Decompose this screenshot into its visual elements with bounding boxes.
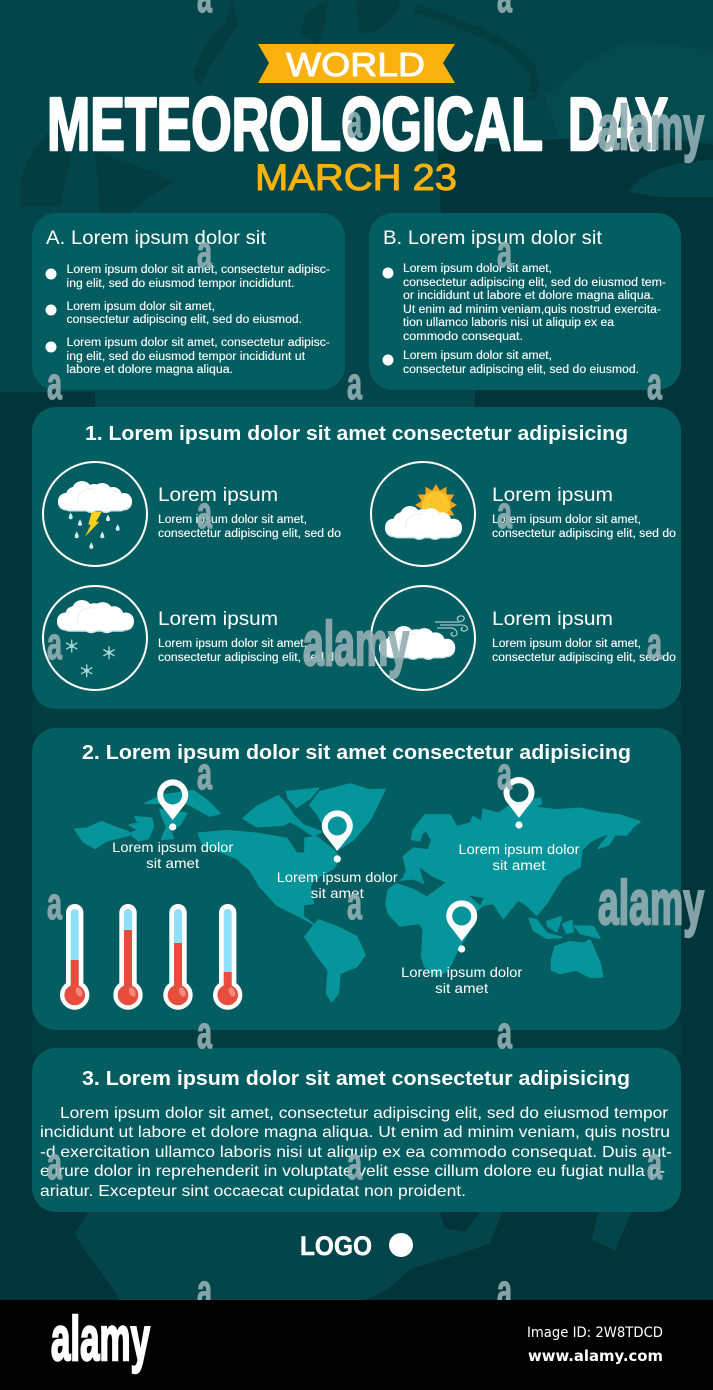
text: thunderstorm: consectetur adipiscing elit, sed do [158, 528, 341, 540]
pin 3 label: Lorem ipsum dolor [458, 841, 580, 857]
text: sunny: consectetur adipiscing elit, sed do [492, 528, 676, 540]
image id: Image ID: 2W8TDCD [527, 1325, 663, 1341]
pin 1 label: sit amet [146, 855, 199, 871]
pin 3 label: sit amet [492, 857, 546, 873]
map pin 3 [504, 777, 534, 829]
icon: snow [43, 586, 147, 690]
text: thunderstorm: Lorem ipsum dolor sit amet, [158, 514, 307, 526]
section 2 heading: 2. Lorem ipsum dolor sit amet consectetur adipisicing [82, 742, 631, 764]
bullet list B: tion ullamco laboris nisi ut aliquip ex ea [403, 317, 615, 329]
section 3 paragraph: Lorem ipsum dolor sit amet, consectetur adipiscing elit, sed do eiusmod tempor [60, 1105, 669, 1122]
bullet list B: consectetur adipiscing elit, sed do eiusmod. [403, 364, 639, 376]
thermometer 3 [163, 904, 193, 1010]
date: MARCH 23 [255, 157, 457, 198]
ribbon: world [258, 44, 455, 83]
bullet list A: ing elit, sed do eiusmod tempor incididunt ut [66, 351, 306, 363]
world map [75, 784, 640, 1002]
text: snow: Lorem ipsum [158, 609, 278, 630]
pin 2 label: Lorem ipsum dolor [277, 869, 398, 885]
header [47, 44, 668, 198]
text: wind [492, 609, 676, 664]
watermark letters: a [347, 358, 363, 409]
bullet list A: Lorem ipsum dolor sit amet, [66, 301, 215, 313]
watermark letters: a [47, 358, 63, 409]
section 3 paragraph: -d exercitation ullamco laboris nisi ut aliquip ex ea commodo consequat. Duis aut- [40, 1144, 672, 1161]
text: sunny: Lorem ipsum [492, 485, 613, 506]
heading A: A. Lorem ipsum dolor sit [46, 228, 267, 249]
watermark letters: a [647, 618, 663, 669]
footer bar [0, 1300, 713, 1390]
icon: thunderstorm [43, 462, 147, 566]
watermark letters: a [197, 487, 213, 538]
pin 1 label [112, 839, 234, 871]
bullet list A: Lorem ipsum dolor sit amet, consectetur adipisc- [66, 337, 330, 349]
watermark letters: a [197, 226, 213, 277]
bullet list B: Lorem ipsum dolor sit amet, [403, 350, 552, 362]
bullet list B [382, 263, 666, 376]
website: www.alamy.com [528, 1347, 663, 1365]
watermark letters: a [47, 618, 63, 669]
watermark letters: a [197, 1265, 213, 1316]
thermometers [60, 904, 242, 1010]
panel: section 1 weather types [32, 407, 681, 709]
section 1 heading: 1. Lorem ipsum dolor sit amet consectetur adipisicing [85, 423, 628, 445]
pin 4 label: sit amet [435, 980, 488, 996]
bullet list A: labore et dolore magna aliqua. [66, 364, 233, 376]
icon: sun behind cloud [371, 462, 475, 566]
thermometer 4 [213, 904, 242, 1010]
bullet list B: Ut enim ad minim veniam,quis nostrud exercita- [403, 304, 661, 316]
text: wind: Lorem ipsum dolor sit amet, [492, 638, 641, 650]
map pin 2 [322, 810, 353, 863]
text: wind: Lorem ipsum [492, 609, 613, 630]
bullet list A [46, 264, 330, 376]
logo: LOGO [300, 1231, 372, 1261]
bullet list A: consectetur adipiscing elit, sed do eiusmod. [66, 314, 302, 326]
bullet list B: commodo consequat. [403, 331, 523, 343]
text: snow [158, 609, 341, 664]
panel: section 3 paragraph [32, 1048, 681, 1212]
thermometer 2 [113, 904, 143, 1010]
watermark letters: a [197, 748, 213, 799]
watermark letters: alamy [303, 610, 409, 679]
watermark letters: a [647, 1138, 663, 1189]
section 3 paragraph: incididunt ut labore et dolore magna aliqua. Ut enim ad minim veniam, quis nostru [40, 1124, 670, 1141]
panel: A [32, 213, 345, 390]
text: wind: consectetur adipiscing elit, sed do [492, 652, 676, 664]
section 3 paragraph: ariatur. Excepteur sint occaecat cupidatat non proident. [40, 1183, 466, 1200]
pin 2 label: sit amet [311, 885, 364, 901]
section 3 heading: 3. Lorem ipsum dolor sit amet consectetur adipisicing [82, 1068, 630, 1090]
thermometer 1 [60, 904, 89, 1010]
watermark letters: a [197, 1007, 213, 1058]
text: sunny [492, 485, 676, 540]
watermark letters: a [347, 1138, 363, 1189]
watermark letters: a [497, 748, 513, 799]
footer brand: alamy [51, 1305, 150, 1374]
heading B: B. Lorem ipsum dolor sit [383, 228, 603, 249]
pin 1 label: Lorem ipsum dolor [112, 839, 234, 855]
text: snow: consectetur adipiscing elit, sed do [158, 652, 341, 664]
watermark letters: a [47, 878, 63, 929]
text: thunderstorm [158, 485, 341, 540]
panel: B [369, 213, 681, 390]
section 3 paragraph: e irure dolor in reprehenderit in voluptate velit esse cillum dolore eu fugiat nulla p- [40, 1163, 665, 1180]
text: sunny: Lorem ipsum dolor sit amet, [492, 514, 641, 526]
watermark letters: a [497, 226, 513, 277]
pin 4 label [401, 964, 523, 996]
watermark letters: a [497, 1007, 513, 1058]
icon: wind [371, 586, 475, 690]
watermark letters: a [47, 1138, 63, 1189]
panel: section 2 world map [32, 728, 681, 1030]
section 3 paragraph [40, 1105, 672, 1200]
ribbon label: WORLD [286, 46, 425, 83]
watermark letters: a [347, 96, 363, 147]
watermark letters: a [647, 358, 663, 409]
watermark letters: a [347, 878, 363, 929]
pin 4 label: Lorem ipsum dolor [401, 964, 523, 980]
map pin 1 [157, 779, 188, 831]
pin 2 label [277, 869, 398, 901]
watermark letters: a [497, 487, 513, 538]
bullet list A: Lorem ipsum dolor sit amet, consectetur adipisc- [66, 264, 330, 276]
bullet list B: or incididunt ut labore et dolore magna aliqua. [403, 290, 654, 302]
bullet list B: consectetur adipiscing elit, sed do eiusmod tem- [403, 277, 666, 289]
pin 3 label [458, 841, 580, 873]
bullet list A: ing elit, sed do eiusmod tempor incididunt. [66, 278, 294, 290]
map pin 4 [446, 900, 477, 953]
bullet list B: Lorem ipsum dolor sit amet, [403, 263, 552, 275]
text: thunderstorm: Lorem ipsum [158, 485, 278, 506]
watermark letters: a [497, 1265, 513, 1316]
text: snow: Lorem ipsum dolor sit amet, [158, 638, 307, 650]
